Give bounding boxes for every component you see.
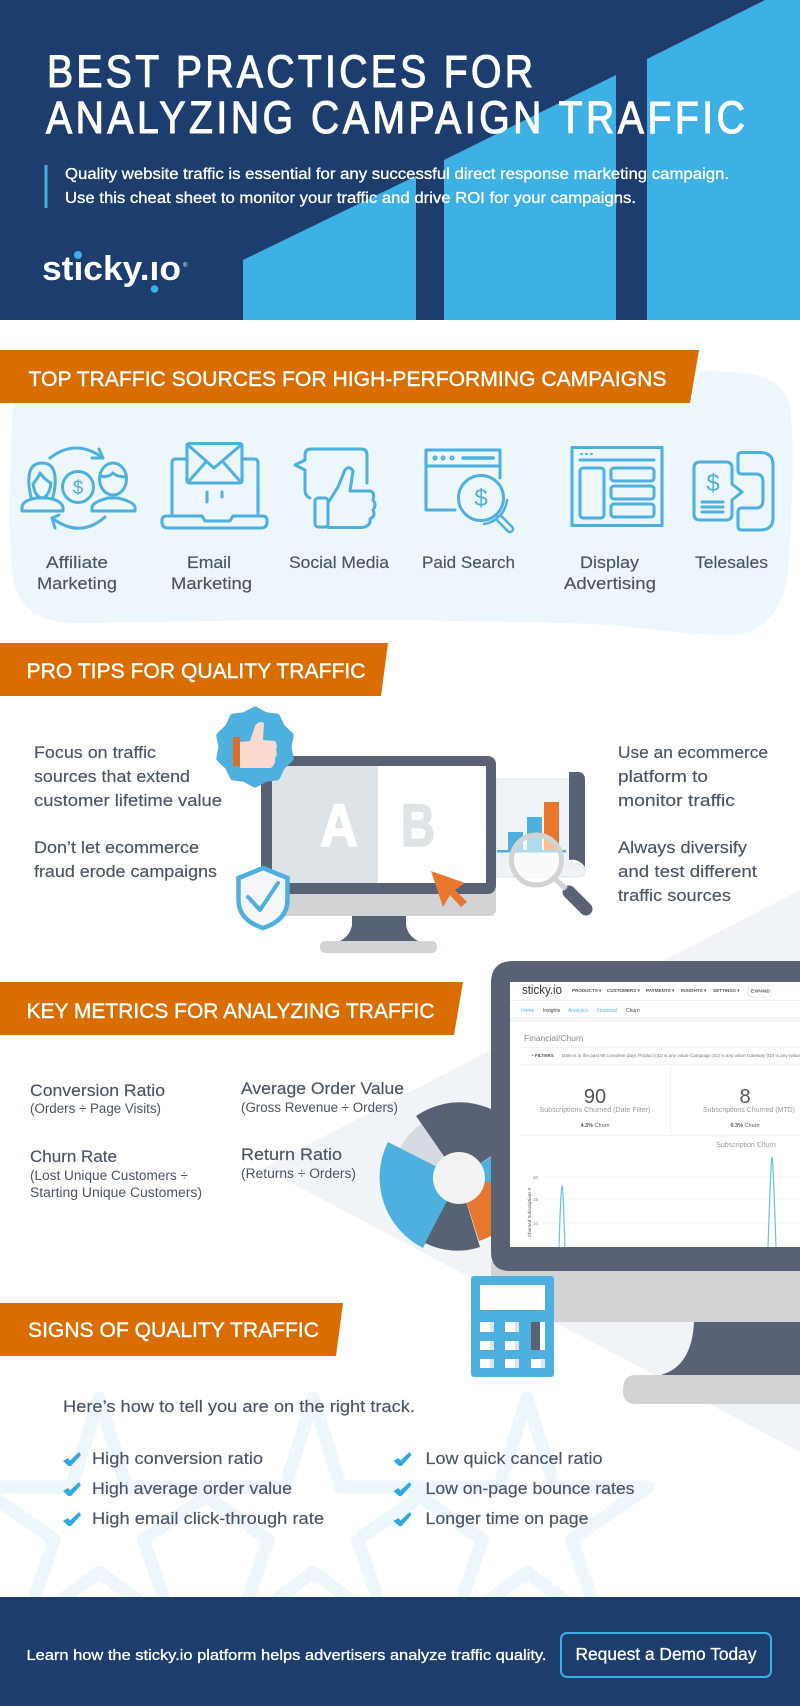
text: key metrics: Starting Unique Customers): [30, 1185, 202, 1200]
icon: email marketing: [162, 444, 267, 528]
dashboard line chart: 15: [533, 1197, 539, 1202]
dashboard navigation: EXPAND: [751, 988, 770, 994]
traffic source labels: Marketing: [171, 574, 252, 593]
text: pro tips right: and test different: [618, 862, 757, 881]
icon: paid search: $: [474, 485, 488, 512]
text: pro tips right: Use an ecommerce: [618, 743, 768, 762]
heading: top traffic sources: [0, 350, 699, 403]
background stars: [0, 1398, 648, 1628]
dashboard filters: Financial/Churn: [524, 1033, 584, 1043]
traffic source labels: Affiliate: [46, 553, 108, 572]
icon: telesales: $: [706, 470, 720, 497]
dashboard breadcrumb: Insights: [543, 1008, 561, 1014]
heading: top traffic sources: TOP TRAFFIC SOURCES FOR HIGH-PERFORMING CAMPAIGNS: [28, 368, 666, 391]
panel: footer: [0, 1597, 800, 1706]
illustration: large monitor with dashboard: [491, 961, 800, 1271]
text: key metrics: (Lost Unique Customers ÷: [30, 1168, 188, 1183]
checklist: right column: Low on-page bounce rates: [426, 1479, 634, 1498]
icon: telesales: [694, 452, 773, 530]
dashboard breadcrumb: Analytics: [568, 1008, 589, 1014]
icon: thumbs-up badge: [220, 710, 290, 784]
A B letters: A: [320, 792, 358, 859]
dashboard navigation: PAYMENTS ▾: [646, 988, 675, 993]
text: key metrics: (Gross Revenue ÷ Orders): [241, 1100, 398, 1115]
dashboard stat: 8: 8: [739, 1086, 751, 1108]
monitor chin: [272, 890, 496, 916]
traffic source labels: Email: [187, 553, 231, 572]
dashboard stat: 90: 4.3% Churn: [580, 1123, 610, 1129]
dashboard breadcrumb: Home: [521, 1008, 535, 1014]
icon: social media: [295, 449, 375, 528]
traffic source labels: Paid Search: [422, 553, 515, 572]
icon: security shield: [238, 868, 288, 928]
text: pro tips left: customer lifetime value: [34, 791, 222, 810]
text: pro tips right: platform to: [618, 767, 708, 786]
dashboard filters: [520, 1033, 800, 1065]
text: pro tips right: [618, 743, 768, 905]
text: pro tips left: Don’t let ecommerce: [34, 838, 199, 857]
text: pro tips left: fraud erode campaigns: [34, 862, 217, 881]
monitor frame: [261, 756, 496, 894]
illustration: A/B monitor: B: [401, 792, 435, 859]
traffic source labels: Advertising: [564, 574, 656, 593]
traffic source labels: [37, 553, 768, 593]
title: BEST PRACTICES FOR: [47, 46, 533, 97]
text: key metrics: Return Ratio: [241, 1145, 342, 1164]
logo: sticky.io: [42, 250, 181, 288]
dashboard navigation: INSIGHTS ▾: [681, 988, 707, 993]
icon: paid search: [426, 450, 510, 529]
icon: affiliate marketing: [22, 448, 135, 528]
dashboard stat: 8: Subscriptions Churned (MTD): [703, 1107, 795, 1114]
heading: key metrics: KEY METRICS FOR ANALYZING TRAFFIC: [26, 1000, 434, 1023]
dashboard navigation: sticky.io: [522, 982, 562, 997]
checklist: right column: Longer time on page: [426, 1509, 588, 1528]
dashboard stat: 90: [540, 1086, 650, 1129]
intro text: [44, 165, 729, 208]
icon: affiliate marketing: $: [73, 478, 84, 499]
footer text: Learn how the sticky.io platform helps advertisers analyze traffic quality.: [26, 1647, 546, 1664]
text: key metrics: Conversion Ratio: [30, 1081, 165, 1100]
dashboard stat: 8: 0.3% Churn: [730, 1123, 760, 1129]
checklist: left column: [63, 1449, 324, 1528]
rising bars graphic: [243, 0, 800, 320]
panel: header: [0, 0, 800, 320]
checklist: left column: High average order value: [92, 1479, 292, 1498]
icon: calculator: [471, 1276, 554, 1377]
dashboard stat: 8: [703, 1086, 795, 1129]
pie chart: [380, 1102, 525, 1251]
dashboard filters: • FILTERS: [532, 1053, 554, 1058]
text: key metrics: [30, 1079, 404, 1200]
illustration: large monitor stand: [491, 1262, 800, 1404]
dashboard line chart: Subscription Churn: [716, 1142, 776, 1149]
text: pro tips right: Always diversify: [618, 838, 748, 857]
illustration: A/B monitor: [261, 756, 496, 953]
illustration: magnifier: [512, 835, 586, 909]
intro text: Use this cheat sheet to monitor your traffic and drive ROI for your campaigns.: [65, 190, 636, 207]
dashboard breadcrumb: [510, 1008, 800, 1022]
checklist: left column: High conversion ratio: [92, 1449, 263, 1468]
illustration: report chart: [496, 772, 585, 877]
icon: display advertising: [572, 448, 662, 526]
dashboard navigation: CUSTOMERS ▾: [607, 988, 641, 993]
text: pro tips left: sources that extend: [34, 767, 190, 786]
dashboard navigation: SETTINGS ▾: [713, 988, 740, 993]
text: key metrics: (Orders ÷ Page Visits): [30, 1101, 161, 1116]
text: pro tips right: traffic sources: [618, 886, 731, 905]
text: signs intro: Here’s how to tell you are on the right track.: [63, 1397, 415, 1416]
dashboard line chart: [527, 1142, 800, 1247]
dashboard breadcrumb: Churn: [626, 1008, 640, 1014]
checklist: left column: High email click-through rate: [92, 1509, 324, 1528]
dashboard line chart: Churned Subscriptions #: [527, 1187, 532, 1237]
intro text: Quality website traffic is essential for any successful direct response marketing campaign.: [65, 166, 729, 183]
dashboard breadcrumb: Financial: [597, 1008, 617, 1014]
text: key metrics: Average Order Value: [241, 1079, 404, 1098]
text: pro tips left: [34, 743, 222, 881]
dashboard navigation: [510, 982, 800, 1001]
monitor stand: [340, 916, 418, 941]
logo: ®: [183, 262, 188, 269]
traffic source labels: Telesales: [695, 553, 768, 572]
dashboard navigation: PRODUCTS ▾: [572, 988, 602, 993]
icon: cursor arrow: [431, 871, 467, 907]
dashboard stat: 90: Subscriptions Churned (Date Filter): [540, 1107, 650, 1114]
button: request a demo: Request a Demo Today: [576, 1644, 757, 1664]
text: key metrics: Churn Rate: [30, 1147, 117, 1166]
traffic source labels: Marketing: [37, 574, 117, 593]
heading: key metrics: [0, 982, 463, 1035]
traffic source labels: Social Media: [289, 553, 390, 572]
title: [46, 46, 745, 143]
heading: pro tips: PRO TIPS FOR QUALITY TRAFFIC: [26, 660, 365, 683]
heading: signs of quality traffic: [0, 1303, 343, 1356]
title: ANALYZING CAMPAIGN TRAFFIC: [46, 92, 745, 143]
text: key metrics: (Returns ÷ Orders): [241, 1166, 356, 1181]
traffic source labels: Display: [580, 553, 640, 572]
text: pro tips right: monitor traffic: [618, 791, 736, 810]
heading: signs of quality traffic: SIGNS OF QUALITY TRAFFIC: [28, 1319, 319, 1342]
dashboard line chart: 10: [533, 1221, 539, 1226]
text: pro tips left: Focus on traffic: [34, 743, 157, 762]
dashboard line chart: 20: [533, 1175, 539, 1180]
dashboard stat: 90: 90: [584, 1086, 606, 1108]
panel: traffic sources background: [10, 370, 793, 635]
dashboard filters: Date is in the past 90 complete days Product (ID) is any value Campaign (ID) is any value Gateway (ID) is any value: [562, 1053, 800, 1058]
background triangle: [263, 890, 800, 1452]
checklist: right column: [394, 1449, 634, 1528]
checklist: right column: Low quick cancel ratio: [426, 1449, 602, 1468]
button: request a demo: [561, 1633, 771, 1677]
heading: pro tips: [0, 643, 388, 696]
